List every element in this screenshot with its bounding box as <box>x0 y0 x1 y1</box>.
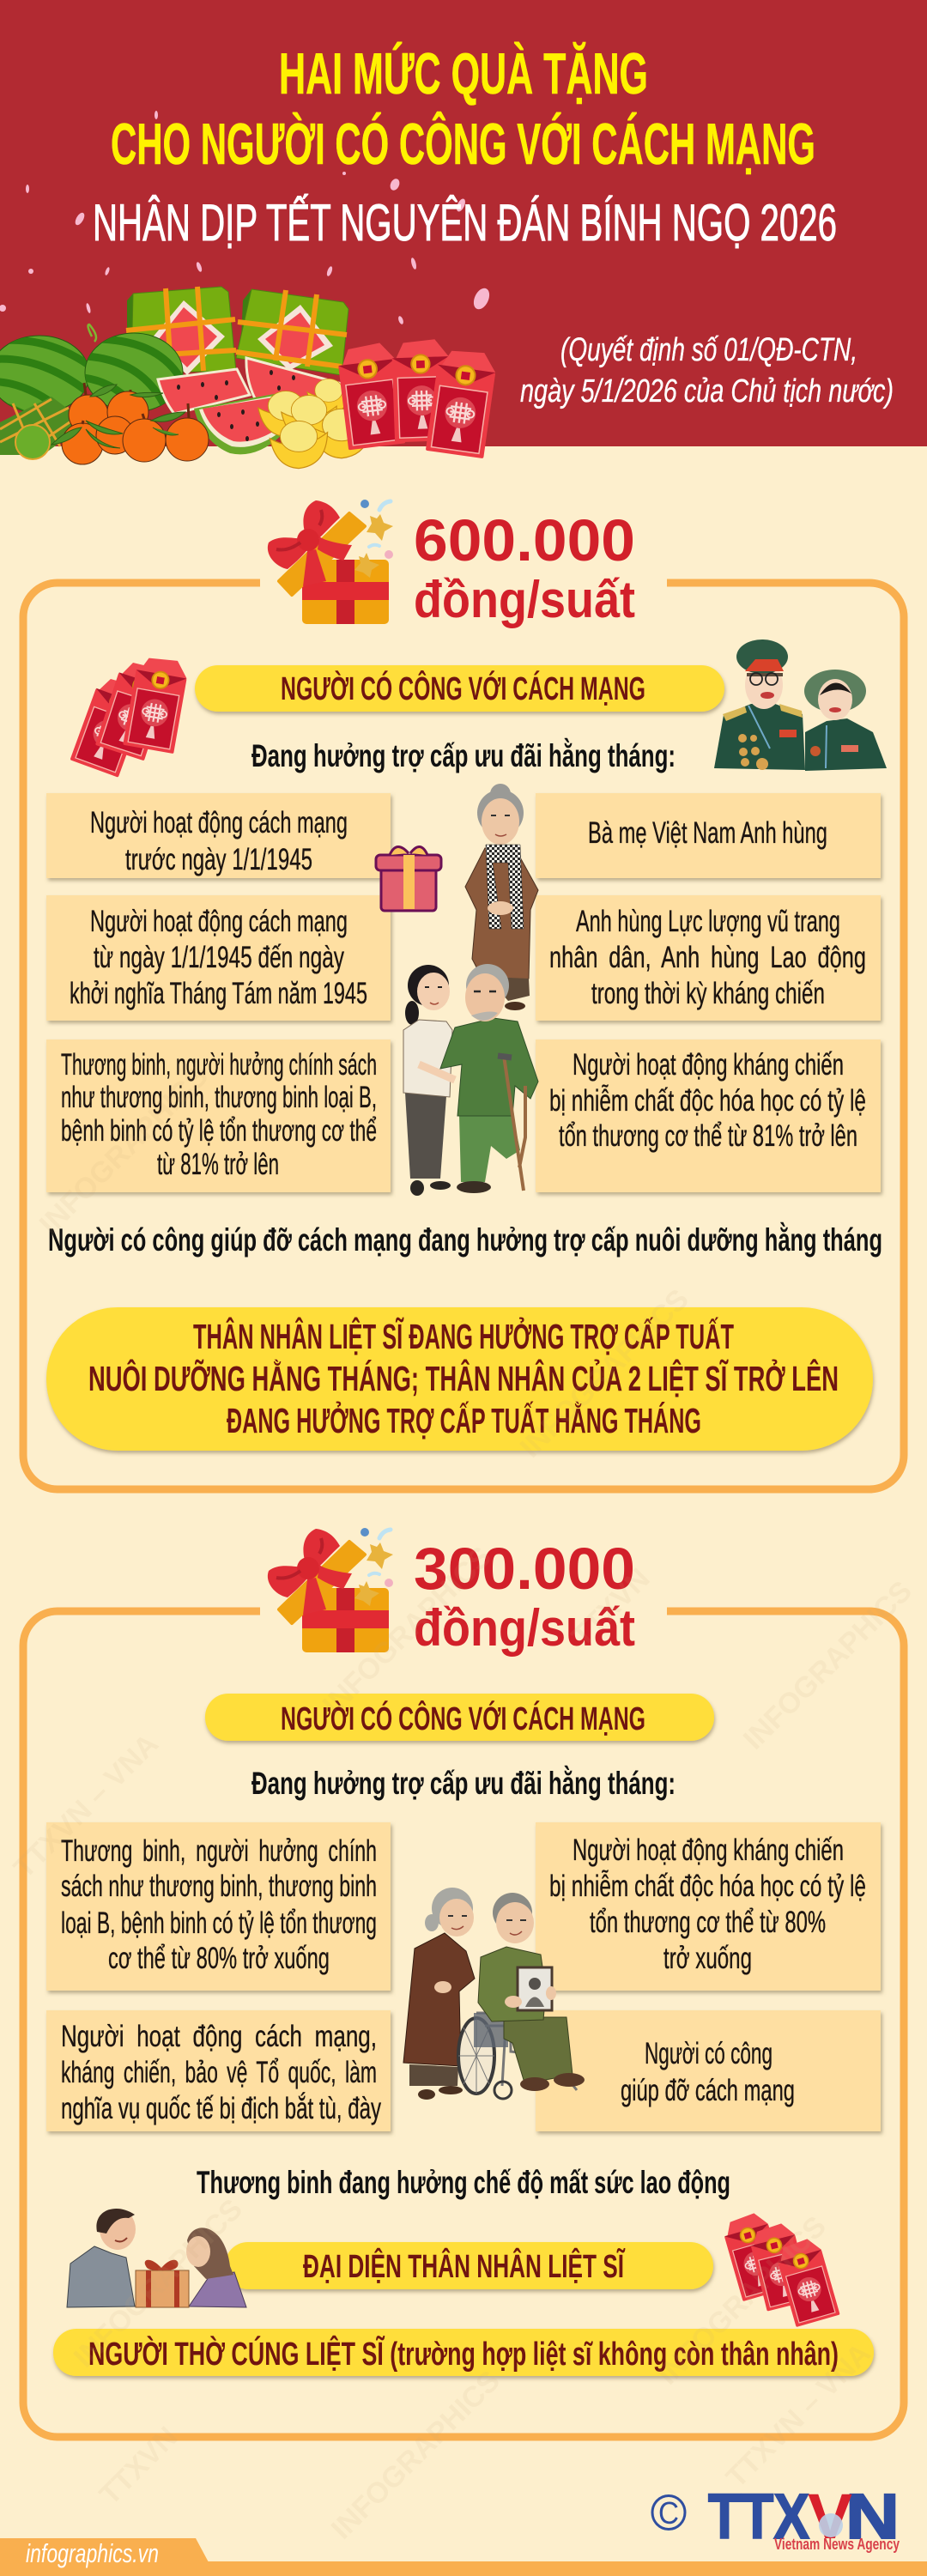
illustration: veterans <box>714 639 887 771</box>
section 1 frame <box>23 583 904 1489</box>
illustration: giving a gift <box>67 2209 246 2307</box>
logo: copyright mark <box>652 2495 685 2531</box>
logo: copyright mark: C <box>658 2495 679 2531</box>
header banner <box>0 0 927 446</box>
watermarks: INFOGRAPHICS <box>68 2192 249 2374</box>
watermarks: TTXVN – VNA <box>720 2337 877 2494</box>
box: war invalids 81: Thương binh, người hưởng chính sách <box>61 1048 377 1082</box>
watermarks: INFOGRAPHICS <box>33 1059 215 1241</box>
banh tet <box>0 397 72 459</box>
watermarks: INFOGRAPHICS <box>317 1540 498 1722</box>
icon: gift 300k <box>268 1528 393 1652</box>
pill: martyrs' representative: ĐẠI DIỆN THÂN NHÂN LIỆT SĨ <box>303 2247 626 2285</box>
illustration: veteran with crutch <box>440 964 538 1193</box>
box: armed forces heroes <box>536 895 881 1021</box>
illustration: elderly couple with wheelchair <box>403 1888 585 2100</box>
oranges <box>52 383 209 464</box>
red envelopes <box>336 339 498 458</box>
box: war invalids 81: bệnh binh có tỷ lệ tổn thương cơ thể <box>61 1114 377 1148</box>
box: helpers: giúp đỡ cách mạng <box>621 2074 795 2107</box>
logo: TTXVN: V <box>808 2481 852 2552</box>
banh chung 1 <box>126 287 236 375</box>
falling petals <box>0 111 493 325</box>
watermarks: INFOGRAPHICS <box>737 1574 918 1756</box>
box: armed forces heroes: trong thời kỳ kháng chiến <box>591 977 825 1010</box>
icon: red envelopes <box>70 654 190 778</box>
watermarks <box>8 1059 918 2546</box>
pill: martyrs' relatives <box>46 1307 873 1451</box>
watermarks: TTXVN <box>566 1562 656 1653</box>
box: war invalids 80: Thương binh, người hưởng chính <box>61 1834 377 1868</box>
box: 1945 uprising: Người hoạt động cách mạng <box>90 905 348 938</box>
box: war invalids 81: như thương binh, thương binh loại B, <box>61 1081 377 1114</box>
box: war invalids 80 <box>46 1822 391 1991</box>
box: before 1945: Người hoạt động cách mạng <box>90 806 348 839</box>
box: war invalids 81 <box>46 1039 391 1192</box>
pill: recipients heading 1 <box>195 665 724 712</box>
title: line 1: HAI MỨC QUÀ TẶNG <box>279 41 648 106</box>
icon: red envelopes right <box>720 2210 840 2327</box>
box: prisoners <box>46 2010 391 2131</box>
melon slices <box>158 358 345 454</box>
box: before 1945 <box>46 793 391 878</box>
box: war invalids 80: loại B, bệnh binh có tỷ lệ tổn thương <box>61 1906 377 1940</box>
amount: 600.000 dong <box>414 507 635 628</box>
subheading: monthly allowance 2: Đang hưởng trợ cấp ưu đãi hằng tháng: <box>251 1765 676 1801</box>
subheading: monthly allowance 1: Đang hưởng trợ cấp ưu đãi hằng tháng: <box>251 737 676 773</box>
illustration: Tet food <box>0 287 498 469</box>
icon: gift 600k <box>268 500 393 624</box>
pill: martyrs' representative <box>225 2242 713 2289</box>
box: war invalids 80: sách như thương binh, thương binh <box>61 1870 377 1903</box>
section 2 frame <box>23 1611 904 2437</box>
footer band: infographics.vn <box>26 2538 159 2568</box>
watermarks: TTXVN <box>94 2421 184 2512</box>
watermelons <box>0 324 185 421</box>
box: agent orange 80: tổn thương cơ thể từ 80% <box>590 1906 826 1939</box>
logo: TTXVN <box>708 2481 900 2553</box>
box: prisoners: Người hoạt động cách mạng, <box>61 2020 377 2053</box>
footer band <box>0 2538 927 2576</box>
illustration: woman assisting <box>403 965 455 1196</box>
box: 1945 uprising: từ ngày 1/1/1945 đến ngày <box>94 941 344 974</box>
box: 1945 uprising <box>46 895 391 1021</box>
amount: 300.000 dong: 300.000 <box>414 1536 635 1602</box>
watermarks: INFOGRAPHICS <box>325 2364 506 2546</box>
gold ingots <box>258 379 372 469</box>
box: heroic mothers <box>536 793 881 878</box>
pill: recipients heading 2 <box>205 1694 714 1741</box>
decision reference <box>520 332 894 409</box>
logo: TTXVN: TTX <box>708 2481 809 2552</box>
illustration: grandmother <box>465 784 538 1010</box>
box: agent orange 80 <box>536 1822 881 1991</box>
box: helpers <box>536 2010 881 2131</box>
box: 1945 uprising: khởi nghĩa Tháng Tám năm 1945 <box>70 977 367 1010</box>
box: war invalids 80: cơ thể từ 80% trở xuống <box>108 1942 330 1975</box>
box: helpers: Người có công <box>645 2037 772 2070</box>
box: prisoners: nghĩa vụ quốc tế bị địch bắt tù, đày <box>61 2092 381 2125</box>
box: agent orange 80: trở xuống <box>663 1942 752 1975</box>
watermarks: INFOGRAPHICS <box>514 1282 695 1464</box>
watermarks: INFOGRAPHICS <box>651 2209 833 2391</box>
box: war invalids 81: từ 81% trở lên <box>157 1148 279 1181</box>
pill: worshippers <box>53 2329 874 2376</box>
pill: recipients heading 1: NGƯỜI CÓ CÔNG VỚI CÁCH MẠNG <box>281 669 645 707</box>
amount: 300.000 dong <box>414 1536 635 1657</box>
box: agent orange 81 <box>536 1039 881 1192</box>
icon: pink gift <box>376 846 441 911</box>
amount: 600.000 dong: 600.000 <box>414 507 635 573</box>
logo: TTXVN: N <box>845 2481 900 2552</box>
pill: recipients heading 2: NGƯỜI CÓ CÔNG VỚI CÁCH MẠNG <box>281 1699 645 1737</box>
box: before 1945: trước ngày 1/1/1945 <box>125 843 312 876</box>
box: prisoners: kháng chiến, bảo vệ Tổ quốc, làm <box>61 2056 377 2089</box>
watermarks: TTXVN – VNA <box>8 1727 165 1885</box>
amount: 600.000 dong: đồng/suất <box>414 571 635 628</box>
banh chung 2 <box>236 289 348 375</box>
amount: 300.000 dong: đồng/suất <box>414 1599 635 1657</box>
